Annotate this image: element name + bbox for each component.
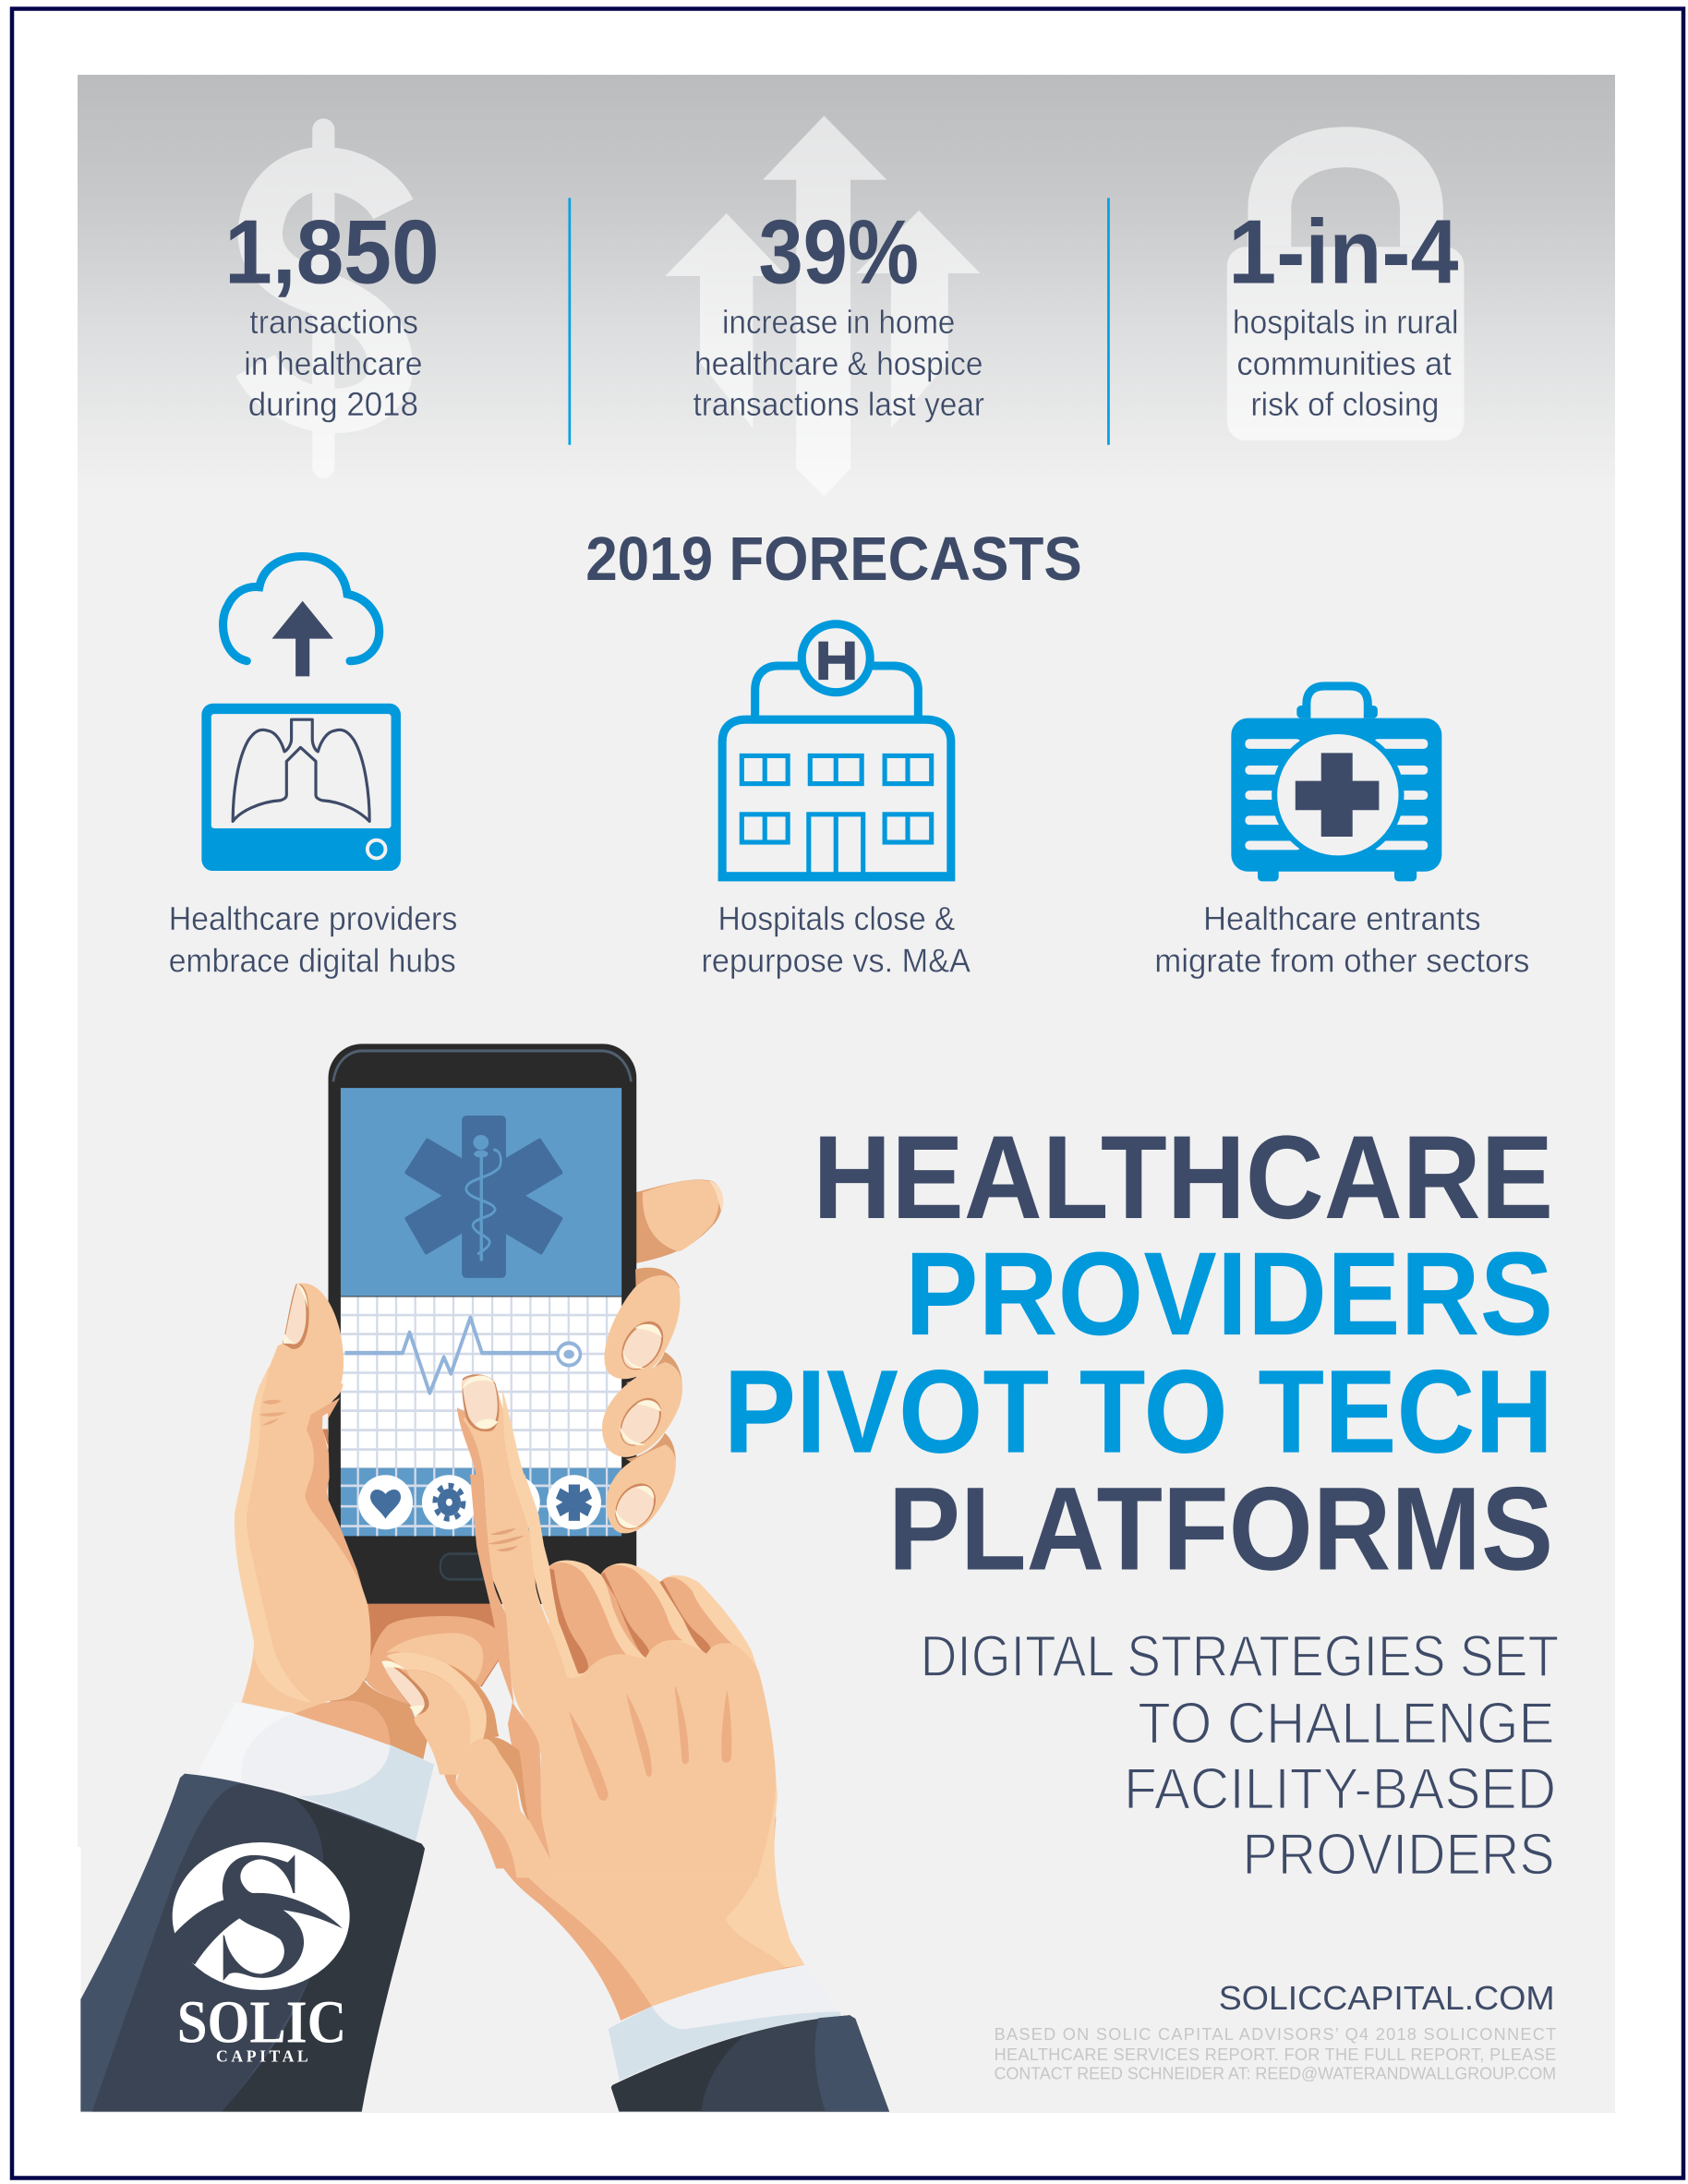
stat: 1,850 transactions: 1,850 (224, 201, 440, 303)
source note: BASED ON SOLIC CAPITAL ADVISORS’ Q4 2018 SOLICONNECT (995, 2025, 1556, 2044)
stat: 39% increase (693, 201, 984, 423)
caption: hospitals close: Hospitals close & (718, 899, 955, 937)
caption: digital hubs: Healthcare providers (169, 899, 457, 937)
main title: HEALTHCARE (813, 1112, 1553, 1244)
illustration: hands holding phone (80, 1044, 889, 2112)
stat: 39% increase: 39% (758, 201, 919, 303)
left shirt cuff (197, 1703, 434, 1842)
subtitle: DIGITAL STRATEGIES SET (921, 1624, 1559, 1689)
caption: hospitals close (702, 899, 971, 979)
stat: 1,850 transactions: transactions (249, 303, 418, 341)
icon: cloud upload and tablet (201, 556, 401, 871)
index finger highlight (511, 1475, 579, 1679)
left thumb holding phone (251, 1283, 344, 1432)
watermark: arrows (665, 115, 981, 497)
stat: 1,850 transactions: during 2018 (248, 385, 418, 423)
stat: 39% increase: increase in home (722, 303, 955, 341)
stat: 1-in-4 hospitals: 1-in-4 (1228, 201, 1459, 303)
source note: CONTACT REED SCHNEIDER AT: REED@WATERANDWALLGROUP.COM (995, 2064, 1556, 2082)
caption: new entrants: migrate from other sectors (1154, 941, 1529, 979)
Solic Capital logo mark (173, 1842, 350, 1990)
divider right (1107, 198, 1109, 445)
tendon marks (569, 1686, 731, 1801)
divider left (569, 198, 571, 445)
back of hand (483, 1475, 776, 1877)
gap between thumb and index (482, 1660, 517, 1748)
stat: 1-in-4 hospitals: communities at (1236, 344, 1452, 382)
caption: digital hubs: embrace digital hubs (169, 941, 456, 979)
left sleeve (80, 1774, 425, 2112)
source note: HEALTHCARE SERVICES REPORT. FOR THE FULL REPORT, PLEASE (995, 2045, 1556, 2064)
main title: PROVIDERS (905, 1228, 1553, 1360)
phone screen: star of life (341, 1088, 621, 1297)
curled fingers (549, 1563, 626, 1674)
phone screen: heart rate chart (341, 1297, 621, 1468)
icon: hospital (718, 624, 954, 881)
right-side fingers gripping phone (602, 1268, 682, 1538)
source note (995, 2025, 1556, 2082)
left hand: palm and thumb fold (235, 1383, 501, 1759)
watermark: dollar sign (255, 129, 393, 467)
stat: 1-in-4 hospitals: risk of closing (1250, 385, 1439, 423)
thumb lower shape (443, 1761, 517, 1868)
icon: medical kit (1231, 686, 1441, 881)
right sleeve (611, 2015, 889, 2112)
stat: 1,850 transactions (224, 201, 440, 423)
main title: PIVOT TO TECH (724, 1346, 1553, 1478)
stat: 1,850 transactions: in healthcare (244, 344, 423, 382)
right index finger tip (457, 1374, 525, 1478)
logo wordmark: CAPITAL (216, 2046, 308, 2065)
right hand: fingers and back of hand (443, 1475, 778, 1877)
caption: hospitals close: repurpose vs. M&A (702, 941, 971, 979)
stat: 39% increase: healthcare & hospice (694, 344, 983, 382)
phone and upper back finger (251, 1044, 723, 1604)
stat: 1-in-4 hospitals: hospitals in rural (1233, 303, 1458, 341)
right thumb and nail (381, 1653, 500, 1775)
website: SOLICCAPITAL.COM (1219, 1979, 1555, 2017)
phone body (329, 1044, 636, 1604)
caption: new entrants (1154, 899, 1529, 979)
heading: 2019 forecasts: 2019 FORECASTS (585, 525, 1082, 594)
main title (724, 1112, 1553, 1596)
right shirt cuff (652, 1965, 840, 2030)
watermark: padlock (1227, 127, 1465, 440)
phone screen: app buttons (341, 1468, 621, 1536)
main title: PLATFORMS (888, 1464, 1553, 1596)
right hand: lower wrist and sleeve (493, 1796, 889, 2112)
subtitle: TO CHALLENGE (1138, 1692, 1555, 1756)
knuckle creases (488, 1528, 524, 1551)
stat: 1-in-4 hospitals (1228, 201, 1459, 423)
light hand silhouette (549, 1560, 778, 1877)
subtitle (921, 1624, 1559, 1887)
caption: new entrants: Healthcare entrants (1203, 899, 1481, 937)
caption: digital hubs (169, 899, 457, 979)
logo wordmark: SOLIC (177, 1989, 346, 2057)
index finger shadow band (470, 1475, 513, 1704)
stat: 39% increase: transactions last year (693, 385, 984, 423)
subtitle: FACILITY-BASED (1124, 1756, 1556, 1821)
subtitle: PROVIDERS (1242, 1822, 1555, 1887)
